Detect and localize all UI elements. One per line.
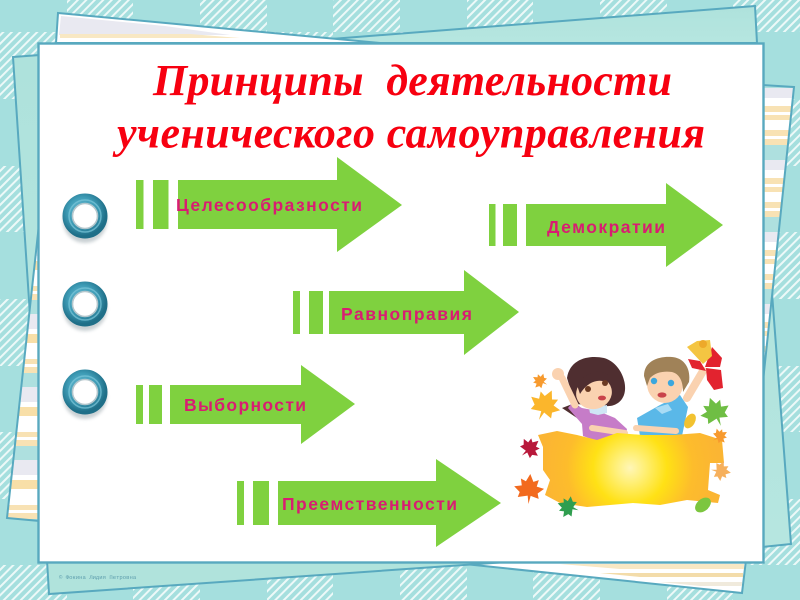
arrow: Выборности: Выборности xyxy=(184,395,306,415)
back sheet: striped left xyxy=(7,215,40,521)
back sheet: teal right xyxy=(762,161,791,547)
arrow: Целесообразности: Целесообразности xyxy=(176,195,362,215)
back sheet: striped right xyxy=(762,85,794,391)
boy xyxy=(636,357,703,436)
back sheet: teal left xyxy=(13,55,40,437)
autumn leaves xyxy=(513,370,734,521)
bell with bow xyxy=(687,340,723,390)
title: ученического самоуправления xyxy=(112,108,705,158)
girl xyxy=(552,357,627,441)
bullet ring 1 xyxy=(63,199,107,243)
arrow: Преемственности: Преемственности xyxy=(282,494,457,514)
illustration: children with banner and leaves xyxy=(513,340,734,521)
arrow: Целесообразности xyxy=(136,157,402,252)
arrow: Преемственности xyxy=(237,459,501,547)
arrow: Демократии: Демократии xyxy=(547,217,665,237)
main white sheet xyxy=(38,44,764,562)
back sheet: teal top xyxy=(280,6,757,43)
back sheet: striped bottom xyxy=(426,560,746,593)
arrow: Демократии xyxy=(489,183,723,267)
back sheet: teal bottom xyxy=(47,560,535,594)
back sheet: striped top xyxy=(56,13,380,43)
bullet ring 2 xyxy=(63,287,107,331)
arrow: Выборности xyxy=(136,365,355,444)
arrow: Равноправия: Равноправия xyxy=(341,304,472,324)
title: Принципы деятельности xyxy=(152,56,672,105)
arrow: Равноправия xyxy=(293,270,519,355)
copyright: © Фокина Лидия Петровна xyxy=(59,574,137,581)
bullet ring 3 xyxy=(63,375,107,419)
title xyxy=(112,56,705,158)
banner xyxy=(538,431,724,507)
